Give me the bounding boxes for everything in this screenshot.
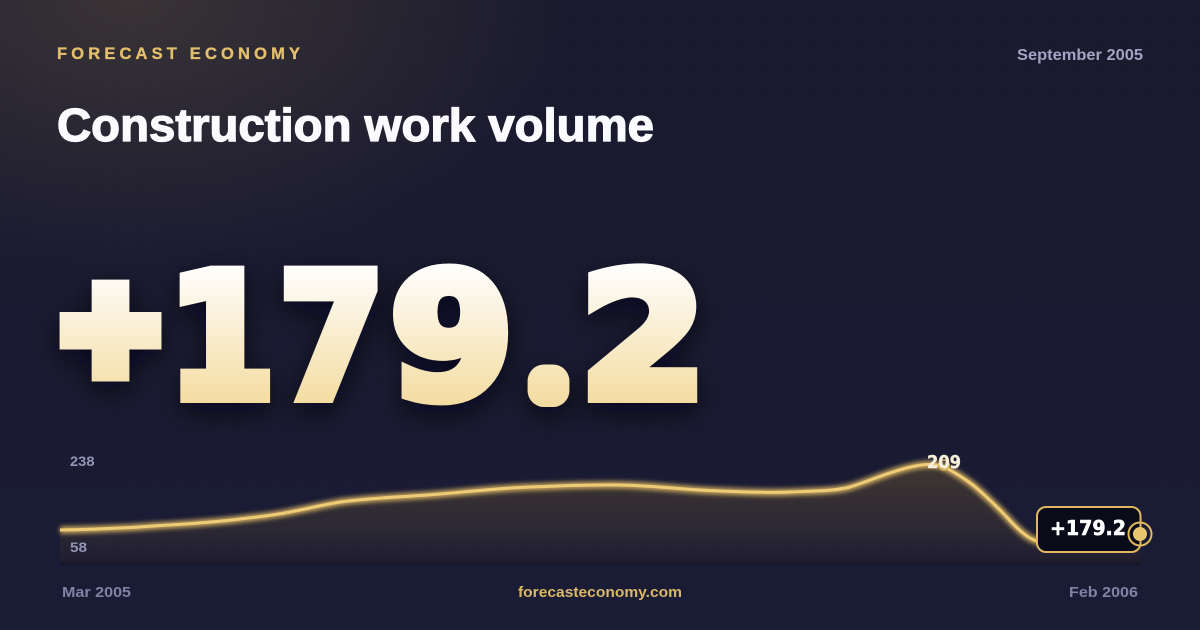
date: September 2005 (1017, 47, 1143, 64)
line (60, 464, 1040, 542)
axis max: 238 (70, 453, 95, 469)
chart (60, 452, 1152, 565)
big number (58, 237, 707, 438)
title: Construction work volume (57, 99, 654, 151)
big number: 1 (168, 237, 275, 438)
brand label: FORECAST ECONOMY (57, 45, 300, 63)
peak marker (939, 460, 949, 470)
end marker (1128, 522, 1152, 546)
big number: . (539, 344, 558, 402)
axis min: 58 (70, 539, 87, 555)
area fill (60, 464, 1141, 565)
value badge: +179.2 (1050, 516, 1126, 540)
end date: Feb 2006 (1069, 584, 1138, 601)
big number: + (58, 253, 163, 400)
peak value: 209 (927, 452, 961, 473)
start date: Mar 2005 (62, 584, 131, 601)
value badge (1037, 507, 1140, 552)
big number: 2 (580, 237, 707, 438)
website: forecasteconomy.com (518, 584, 682, 601)
line glow (60, 464, 1040, 542)
big number: 7 (279, 239, 384, 438)
big number: 9 (390, 238, 513, 438)
